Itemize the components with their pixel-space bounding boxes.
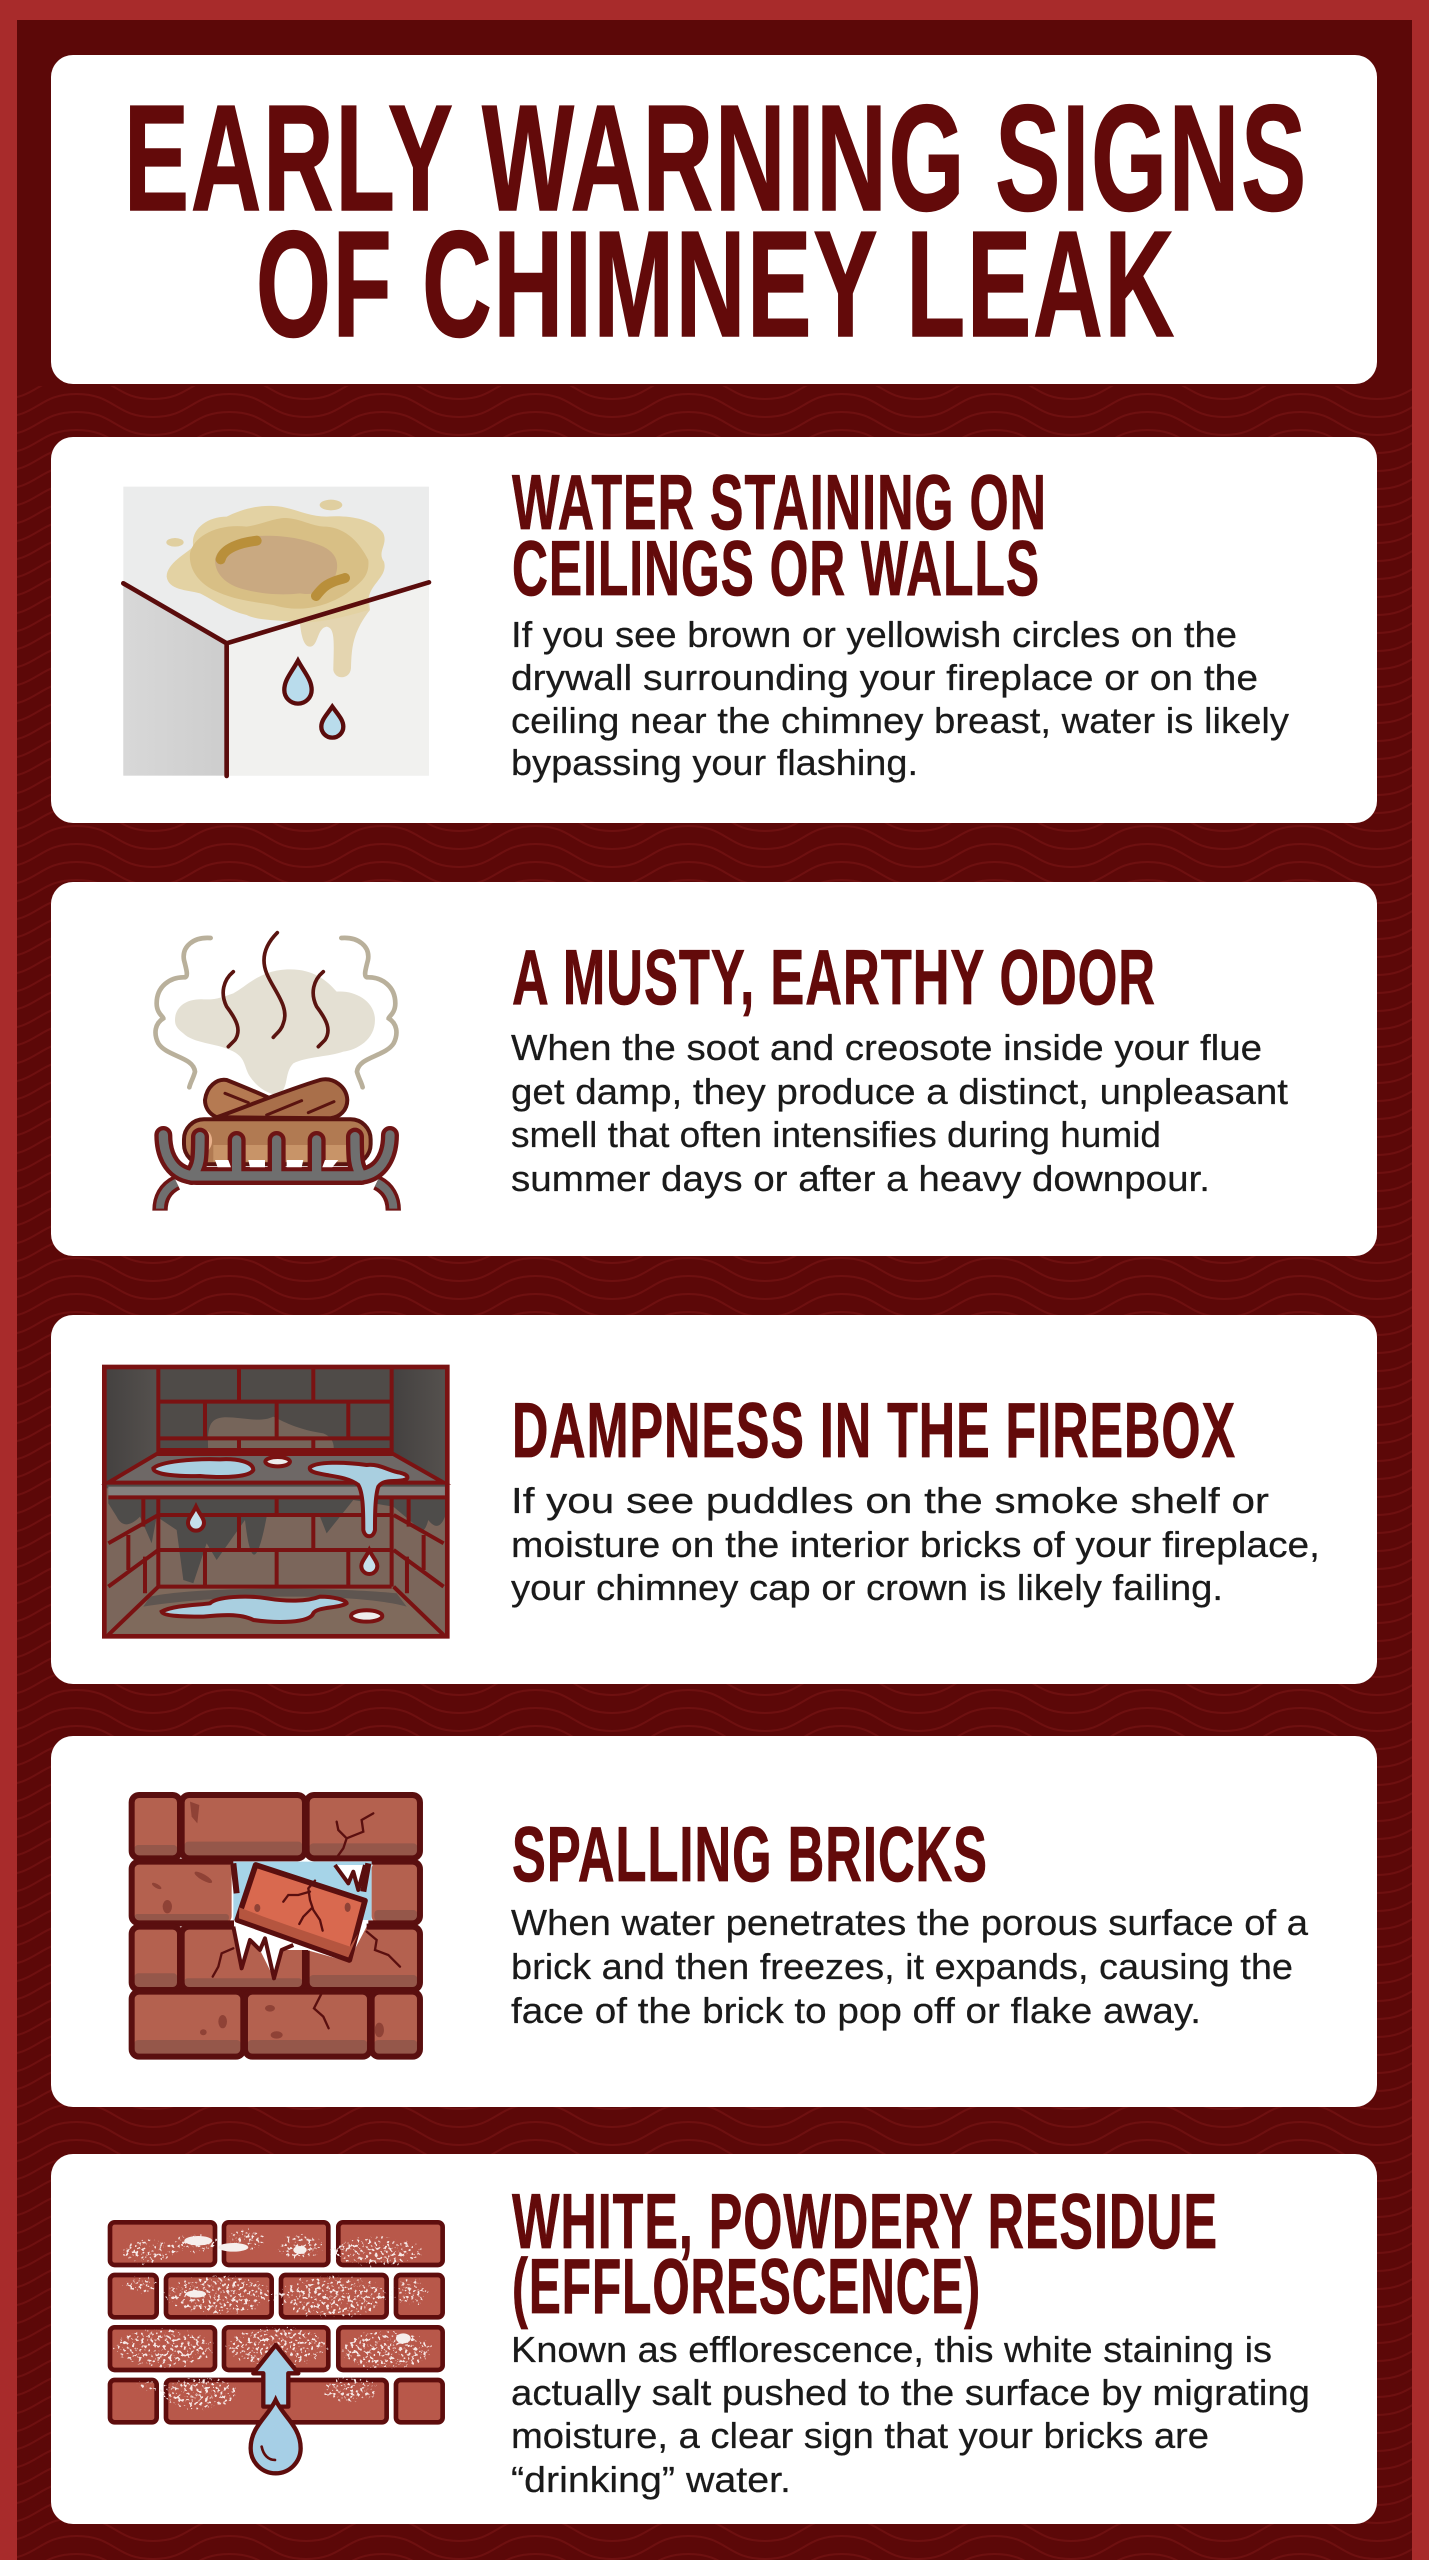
heading: CEILINGS OR WALLS — [512, 524, 1040, 612]
heading: (EFFLORESCENCE) — [512, 2242, 981, 2330]
icon: spalling brick wall — [132, 1795, 420, 2057]
body text: bypassing your flashing. — [511, 742, 918, 783]
body text: Known as efflorescence, this white staining is — [511, 2329, 1272, 2370]
body text: If you see brown or yellowish circles on the — [511, 614, 1237, 655]
body text: drywall surrounding your fireplace or on the — [511, 657, 1258, 698]
body text: your chimney cap or crown is likely failing. — [511, 1567, 1223, 1608]
heading: SPALLING BRICKS — [512, 1810, 988, 1898]
panel: musty odor — [51, 882, 1377, 1256]
icon: brick wall with white salt deposits — [108, 2222, 443, 2473]
body text: moisture on the interior bricks of your fireplace, — [511, 1524, 1320, 1565]
body text: smell that often intensifies during humid — [511, 1114, 1161, 1155]
white salt speckle — [108, 2225, 437, 2413]
body text: get damp, they produce a distinct, unpleasant — [511, 1071, 1288, 1112]
body text: If you see puddles on the smoke shelf or — [511, 1480, 1269, 1521]
body text: ceiling near the chimney breast, water is likely — [511, 700, 1289, 741]
heading: WATER STAINING ON — [512, 458, 1047, 546]
panel: water staining — [51, 437, 1377, 823]
body text: When water penetrates the porous surface of a — [511, 1902, 1309, 1943]
body text: actually salt pushed to the surface by migrating — [511, 2372, 1310, 2413]
panel: spalling bricks — [51, 1736, 1377, 2107]
body text: moisture, a clear sign that your bricks are — [511, 2415, 1209, 2456]
panel: dampness in firebox — [51, 1315, 1377, 1684]
body text: “drinking” water. — [511, 2459, 791, 2500]
tilted loose brick — [237, 1865, 365, 1960]
body text: summer days or after a heavy downpour. — [511, 1158, 1210, 1199]
panel: efflorescence — [51, 2154, 1377, 2524]
icon: wet firebox — [102, 1365, 449, 1638]
body text: face of the brick to pop off or flake away. — [511, 1990, 1201, 2031]
icon: water stained ceiling corner — [123, 487, 429, 776]
body text: brick and then freezes, it expands, causing the — [511, 1946, 1293, 1987]
icon: logs on grate with odor — [156, 933, 396, 1211]
body text: When the soot and creosote inside your flue — [511, 1027, 1262, 1068]
panel: title — [51, 55, 1377, 384]
